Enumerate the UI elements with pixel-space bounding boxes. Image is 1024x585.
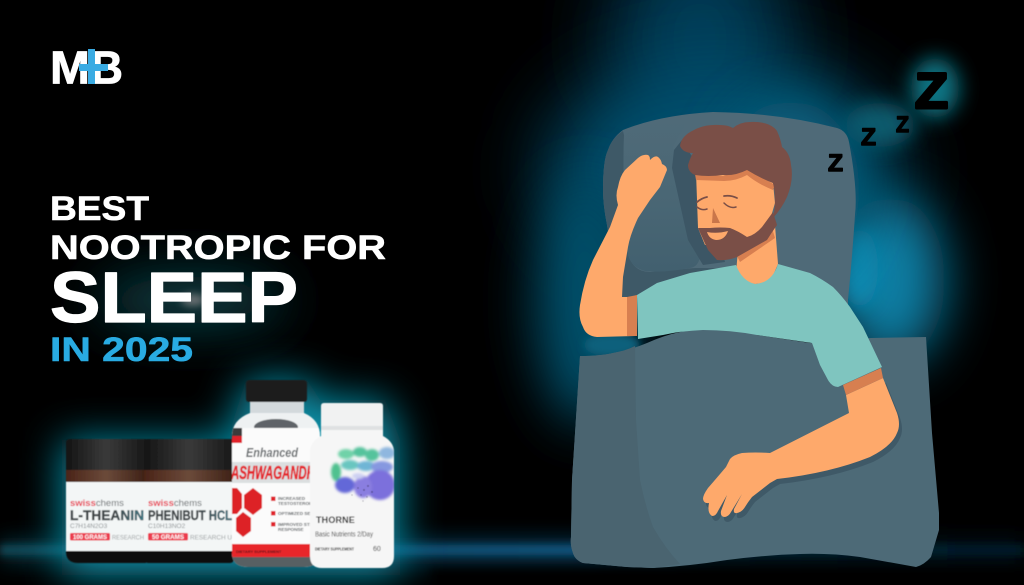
benefit bullets: OPTIMIZED SEX: [278, 511, 314, 516]
pillow: front fold: [624, 116, 700, 272]
illustration: sleeping man: [571, 112, 939, 568]
hair: [680, 122, 792, 218]
big z: Z: [915, 63, 948, 119]
title: [50, 190, 386, 369]
product: Phenibut HCL jar: swisschems: [148, 498, 202, 509]
logo: [50, 42, 123, 94]
t-shirt: [637, 264, 882, 387]
enhanced wordmark: Enhanced: [246, 445, 299, 460]
blanket: [571, 330, 939, 568]
product: Thorne bottle: [310, 403, 395, 568]
hexagon badges: [232, 488, 262, 537]
logo: M: [50, 42, 90, 94]
nose: [712, 208, 720, 223]
forearm and hand: [703, 378, 899, 517]
title line: best: BEST: [50, 190, 149, 228]
benefit bullets: [270, 496, 310, 532]
pillow: shaded side: [603, 131, 745, 320]
title line: sleep: SLEEP: [50, 259, 298, 338]
product: Ashwagandha bottle: DIETARY SUPPLEMENT: [236, 549, 282, 554]
mouth: [707, 231, 728, 240]
product: L-Theanine jar: L-THEANIN: [70, 508, 144, 523]
title line: nootropic for: NOOTROPIC FOR: [50, 229, 386, 267]
small z one: Z: [828, 150, 843, 177]
small z two: Z: [861, 124, 876, 151]
pillow: [603, 112, 856, 335]
sleeve band: [843, 368, 883, 395]
product: Phenibut HCL jar: [144, 439, 234, 563]
inner arm shadow: [627, 295, 637, 336]
product: Phenibut HCL jar: PHENIBUT HCL: [148, 508, 232, 523]
face: [696, 166, 775, 245]
neck shadow: [737, 228, 775, 262]
title line: in 2025: IN 2025: [50, 331, 193, 369]
product: Ashwagandha bottle: [230, 380, 323, 568]
watercolor artwork: [331, 447, 395, 502]
capsule count: 60: [373, 546, 381, 553]
forearm shadow: [706, 383, 902, 522]
sleep letters: [828, 63, 948, 177]
thorne wordmark: THORNE: [316, 515, 356, 525]
benefit bullets: RESPONSE: [278, 527, 304, 532]
small z three: Z: [896, 112, 909, 137]
eyes and nose: [697, 196, 737, 223]
dietary supplement: DIETARY SUPPLEMENT: [315, 546, 354, 552]
product: L-Theanine jar: RESEARCH: [112, 534, 144, 542]
head shadow: [672, 140, 725, 265]
product: L-Theanine jar: C7H14N2O3: [70, 523, 108, 530]
raised arm: [579, 155, 667, 337]
product: Phenibut HCL jar: 50 GRAMS: [152, 535, 184, 541]
benefit bullets: TESTOSTERONE: [278, 501, 315, 506]
beard: [698, 212, 777, 260]
benefit bullets: INCREASED: [278, 496, 306, 501]
blanket: left fold: [571, 346, 680, 568]
product: Phenibut HCL jar: C10H13NO2: [148, 523, 186, 530]
benefit bullets: IMPROVED STRESS: [278, 522, 322, 527]
product: L-Theanine jar: 100 GRAMS: [73, 535, 107, 541]
product: L-Theanine jar: swisschems: [70, 498, 124, 509]
product halo: [62, 380, 400, 575]
neck: [736, 225, 778, 284]
product: L-Theanine jar: [66, 439, 146, 563]
product name: Basic Nutrients 2/Day: [315, 532, 373, 538]
ashwagandha wordmark: ASHWAGANDHA: [230, 463, 323, 483]
products: [66, 380, 395, 568]
product: Phenibut HCL jar: RESEARCH U: [190, 534, 232, 542]
hairline shadow: [695, 168, 775, 190]
logo: B: [91, 42, 123, 94]
